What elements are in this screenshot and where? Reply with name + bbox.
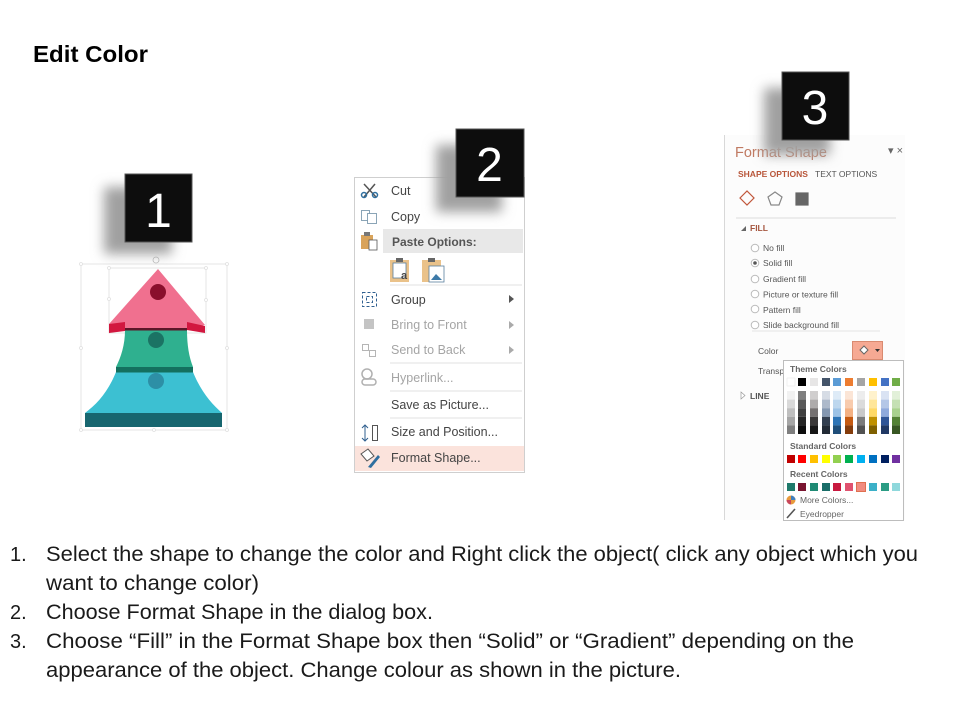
fill options: Pattern fill <box>763 305 801 315</box>
panel: step 2 context menu <box>354 178 524 472</box>
icon: copy <box>362 210 376 224</box>
menu labels: Hyperlink... <box>391 371 454 385</box>
menu labels: Format Shape... <box>391 451 481 465</box>
step 2 instruction: 2. <box>10 602 27 624</box>
dot bottom <box>148 373 164 389</box>
step 1 instruction: 1. <box>10 544 27 566</box>
icon: paste picture <box>422 258 444 282</box>
badge 2 shadow <box>436 145 502 212</box>
tabs: SHAPE OPTIONS <box>738 169 808 179</box>
icon: paste <box>361 232 377 250</box>
badge 1 square <box>125 174 192 242</box>
fill triangle <box>741 226 746 231</box>
recent label: Recent Colors <box>790 469 848 479</box>
instructions text <box>10 543 918 682</box>
submenu arrows <box>509 295 514 354</box>
color label: Color <box>758 346 778 356</box>
tab icons <box>740 191 808 205</box>
fill options: Gradient fill <box>763 274 806 284</box>
dot middle <box>148 332 164 348</box>
menu labels: Group <box>391 293 426 307</box>
base tier <box>85 372 222 427</box>
badge 1 number: 1 <box>145 185 172 238</box>
paste highlight <box>383 229 523 253</box>
panel: step 1 pyramid shape <box>80 257 228 432</box>
pane left edge <box>724 135 725 520</box>
menu labels: Cut <box>391 184 411 198</box>
color button <box>852 342 882 360</box>
title: Edit Color <box>33 41 148 67</box>
step 3 instruction: appearance of the object. Change colour as shown in the picture. <box>46 659 681 682</box>
menu labels: Paste Options: <box>392 235 477 249</box>
red tab left <box>109 322 125 333</box>
badge 3 square <box>782 72 849 140</box>
fill options: Solid fill <box>763 258 792 268</box>
icon: hyperlink <box>362 369 376 385</box>
middle tier <box>116 330 193 367</box>
fill options: No fill <box>763 243 784 253</box>
red tab right <box>187 322 205 333</box>
dot top <box>150 284 166 300</box>
step 3 instruction: Choose “Fill” in the Format Shape box then “Solid” or “Gradient” depending on the <box>46 630 854 653</box>
badge 3 <box>764 72 849 155</box>
step 1 instruction: want to change color) <box>45 572 259 595</box>
badge 1 <box>104 174 192 254</box>
fill options <box>751 243 839 330</box>
badge 3 number: 3 <box>802 82 828 135</box>
menu labels <box>391 184 498 465</box>
pane close controls: ▾ × <box>888 145 903 157</box>
theme label: Theme Colors <box>790 364 847 374</box>
badge 1 shadow <box>104 187 172 254</box>
base plinth <box>85 413 222 427</box>
standard colors row <box>787 455 900 463</box>
divider <box>736 217 896 219</box>
eyedropper: Eyedropper <box>800 509 844 519</box>
icon: size and position <box>362 425 378 441</box>
recent colors row <box>787 482 900 492</box>
format highlight <box>355 446 524 471</box>
menu labels: Send to Back <box>391 343 466 357</box>
standard label: Standard Colors <box>790 441 856 451</box>
icon: send to back <box>362 344 376 356</box>
step 1 instruction: Select the shape to change the color and Right click the object( click any object which you <box>46 543 918 566</box>
line triangle <box>741 392 745 399</box>
tabs: TEXT OPTIONS <box>815 169 878 179</box>
badge 2 square <box>456 129 524 197</box>
panel: step 3 format shape pane <box>724 135 905 520</box>
icon: group <box>362 292 376 306</box>
dark bar <box>125 328 187 330</box>
menu labels: Bring to Front <box>391 318 467 332</box>
selection handles <box>80 257 228 432</box>
menu labels: Size and Position... <box>391 425 498 439</box>
badge 3 shadow <box>764 88 830 155</box>
fill options: Picture or texture fill <box>763 290 838 300</box>
theme colors row <box>787 378 900 386</box>
divider lower <box>752 330 880 332</box>
step 3 instruction: 3. <box>10 631 27 653</box>
icon: bring to front <box>364 319 374 329</box>
fill heading: FILL <box>750 223 768 233</box>
step 2 instruction: Choose Format Shape in the dialog box. <box>46 601 433 624</box>
badge 2 <box>436 129 524 212</box>
more colors: More Colors... <box>800 495 853 505</box>
icon: paste text: a <box>401 270 408 282</box>
middle band <box>116 367 193 372</box>
separators <box>390 285 522 418</box>
transparency label: Transp <box>758 366 784 376</box>
top tier <box>109 269 205 328</box>
step 1 instruction <box>10 543 918 595</box>
tabs <box>738 169 878 179</box>
icon: paste text <box>390 258 409 282</box>
pane heading: Format Shape <box>735 145 827 161</box>
theme shades <box>787 391 900 434</box>
icon: format shape <box>361 449 380 468</box>
color popup <box>784 360 904 520</box>
menu labels: Save as Picture... <box>391 398 489 412</box>
step 3 instruction <box>10 630 854 682</box>
menu box <box>354 178 524 472</box>
icon: cut <box>362 184 378 198</box>
badge 2 number: 2 <box>476 139 503 192</box>
line heading: LINE <box>750 391 770 401</box>
fill options: Slide background fill <box>763 320 839 330</box>
pane background <box>725 135 905 520</box>
menu labels: Copy <box>391 210 421 224</box>
popup box <box>784 360 904 520</box>
